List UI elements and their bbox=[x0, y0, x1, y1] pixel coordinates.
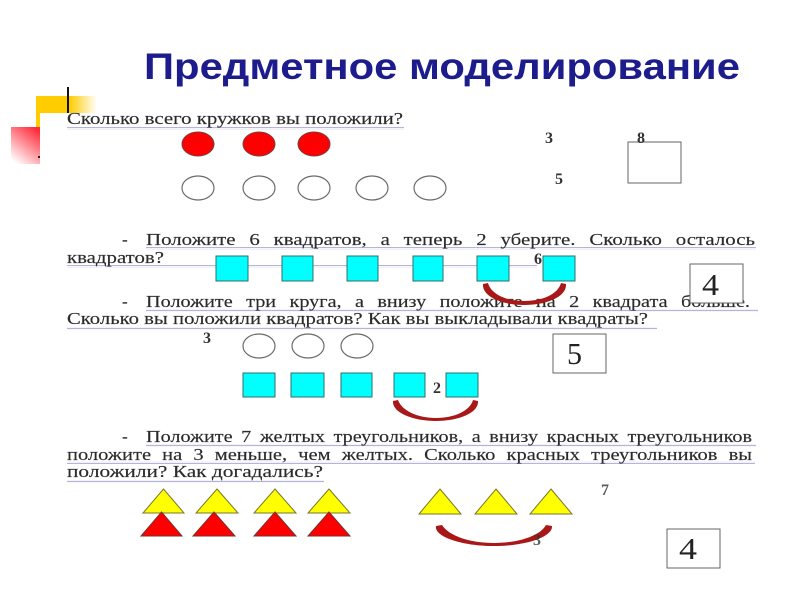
number labels row one: 8 bbox=[637, 130, 645, 147]
worksheet text: Сколько всего кружков вы положили? bbox=[67, 109, 403, 128]
worksheet text: - bbox=[122, 230, 128, 249]
yellow triangles right bbox=[419, 489, 572, 514]
red triangles left bbox=[141, 512, 350, 536]
number label: 6: 6 bbox=[534, 251, 542, 268]
arc: three fewer triangles bbox=[436, 525, 552, 546]
answer box: 4 bottom: 4 bbox=[679, 531, 698, 566]
worksheet text: Положите 7 желтых треугольников, а внизу красных треугольников bbox=[146, 427, 752, 446]
number labels row one: 5 bbox=[555, 171, 563, 188]
worksheet text: положили? Как догадались? bbox=[67, 462, 323, 481]
yellow triangles left bbox=[143, 489, 350, 513]
empty circles row two bbox=[243, 334, 373, 358]
worksheet text bbox=[67, 109, 758, 483]
title: Предметное моделирование bbox=[144, 46, 740, 87]
cyan squares row bbox=[216, 256, 575, 281]
worksheet text: - bbox=[122, 427, 128, 446]
answer box: 4 bottom bbox=[667, 529, 720, 568]
answer box: 8 bbox=[628, 142, 681, 183]
arc: two squares removed bbox=[483, 283, 566, 305]
red circles bbox=[182, 132, 330, 156]
worksheet text: Положите три круга, а внизу положите на 2 квадрата больше. bbox=[146, 292, 750, 311]
answer box: 4 bbox=[690, 264, 743, 303]
worksheet text: квадратов? bbox=[67, 248, 164, 267]
number labels row one bbox=[545, 130, 645, 188]
number label: 3: 3 bbox=[203, 330, 211, 347]
cyan squares row two bbox=[243, 373, 478, 397]
worksheet text: - bbox=[122, 292, 128, 311]
empty circles row one bbox=[182, 176, 446, 200]
answer box: 4: 4 bbox=[702, 267, 720, 302]
number labels triangles bbox=[533, 482, 609, 549]
number label: 2: 2 bbox=[433, 380, 441, 397]
worksheet text: Положите 6 квадратов, а теперь 2 уберите. Сколько осталось bbox=[146, 230, 755, 249]
number labels row one: 3 bbox=[545, 130, 553, 147]
number labels triangles: 7 bbox=[601, 482, 609, 499]
number labels triangles: 3 bbox=[533, 532, 541, 549]
answer box: 5 bbox=[553, 334, 606, 373]
worksheet text: Сколько вы положили квадратов? Как вы выкладывали квадраты? bbox=[67, 309, 648, 328]
answer box: 5: 5 bbox=[567, 336, 582, 371]
worksheet text: положите на 3 меньше, чем желтых. Сколько красных треугольников вы bbox=[67, 445, 753, 464]
arc: two extra squares bbox=[393, 400, 478, 421]
decorative corner accent bbox=[11, 87, 97, 164]
